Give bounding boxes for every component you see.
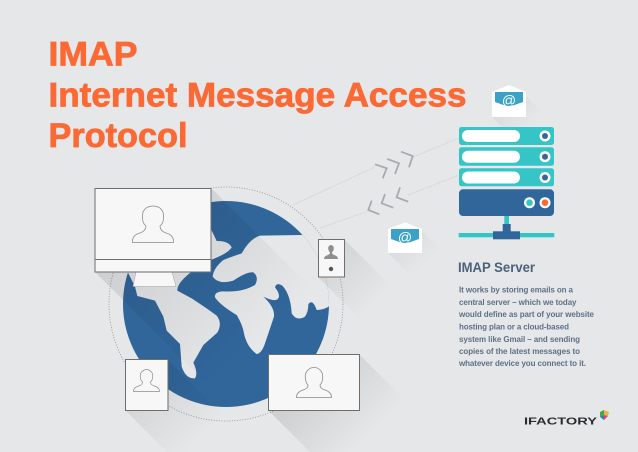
icon: monitor with user bbox=[95, 188, 211, 286]
dotted orbit bbox=[109, 187, 343, 421]
title: Protocol bbox=[48, 117, 188, 155]
shadow: top envelope bbox=[492, 96, 549, 140]
dotted connection lines bbox=[293, 138, 459, 228]
description text: central server – which we today bbox=[459, 298, 577, 307]
description text: whatever device you connect to it. bbox=[458, 359, 586, 368]
icon: lower envelope bbox=[388, 222, 422, 253]
description text: It works by storing emails on a bbox=[459, 286, 574, 294]
shadow: monitor bbox=[95, 188, 321, 382]
shadow: laptop bbox=[268, 354, 414, 452]
description text: would define as part of your website bbox=[458, 310, 595, 319]
server unit 3 bbox=[459, 168, 554, 186]
title bbox=[48, 36, 466, 155]
icon: lower envelope: @ bbox=[398, 229, 412, 245]
title: IMAP bbox=[48, 36, 138, 74]
title: Internet Message Access bbox=[48, 77, 466, 115]
description text: copies of the latest messages to bbox=[459, 347, 580, 356]
server unit 2 bbox=[459, 147, 554, 166]
server base unit bbox=[459, 189, 554, 216]
network connector bbox=[459, 216, 554, 239]
heading: IMAP Server: IMAP Server bbox=[458, 260, 536, 275]
server stack bbox=[459, 127, 554, 239]
globe illustration bbox=[109, 187, 347, 421]
description text: system like Gmail – and sending bbox=[459, 335, 580, 344]
icon: tablet with user bbox=[126, 360, 168, 410]
description text: hosting plan or a cloud-based bbox=[459, 322, 569, 331]
shadow: tablet bbox=[125, 360, 223, 452]
icon: laptop screen with user bbox=[268, 354, 360, 410]
shadow: lower envelope bbox=[388, 231, 445, 276]
description text bbox=[458, 286, 595, 368]
server unit 1 bbox=[459, 127, 554, 145]
icon: top envelope bbox=[492, 85, 526, 117]
icon: logo cube bbox=[600, 410, 609, 420]
logo: IFACTORY bbox=[524, 410, 609, 428]
arrows: outgoing chevrons bbox=[375, 152, 413, 178]
logo: IFACTORY: IFACTORY bbox=[524, 416, 598, 428]
arrows: incoming chevrons bbox=[368, 187, 408, 214]
icon: phone with user bbox=[318, 240, 344, 277]
shadow: phone bbox=[318, 239, 389, 322]
icon: top envelope: @ bbox=[502, 92, 516, 108]
